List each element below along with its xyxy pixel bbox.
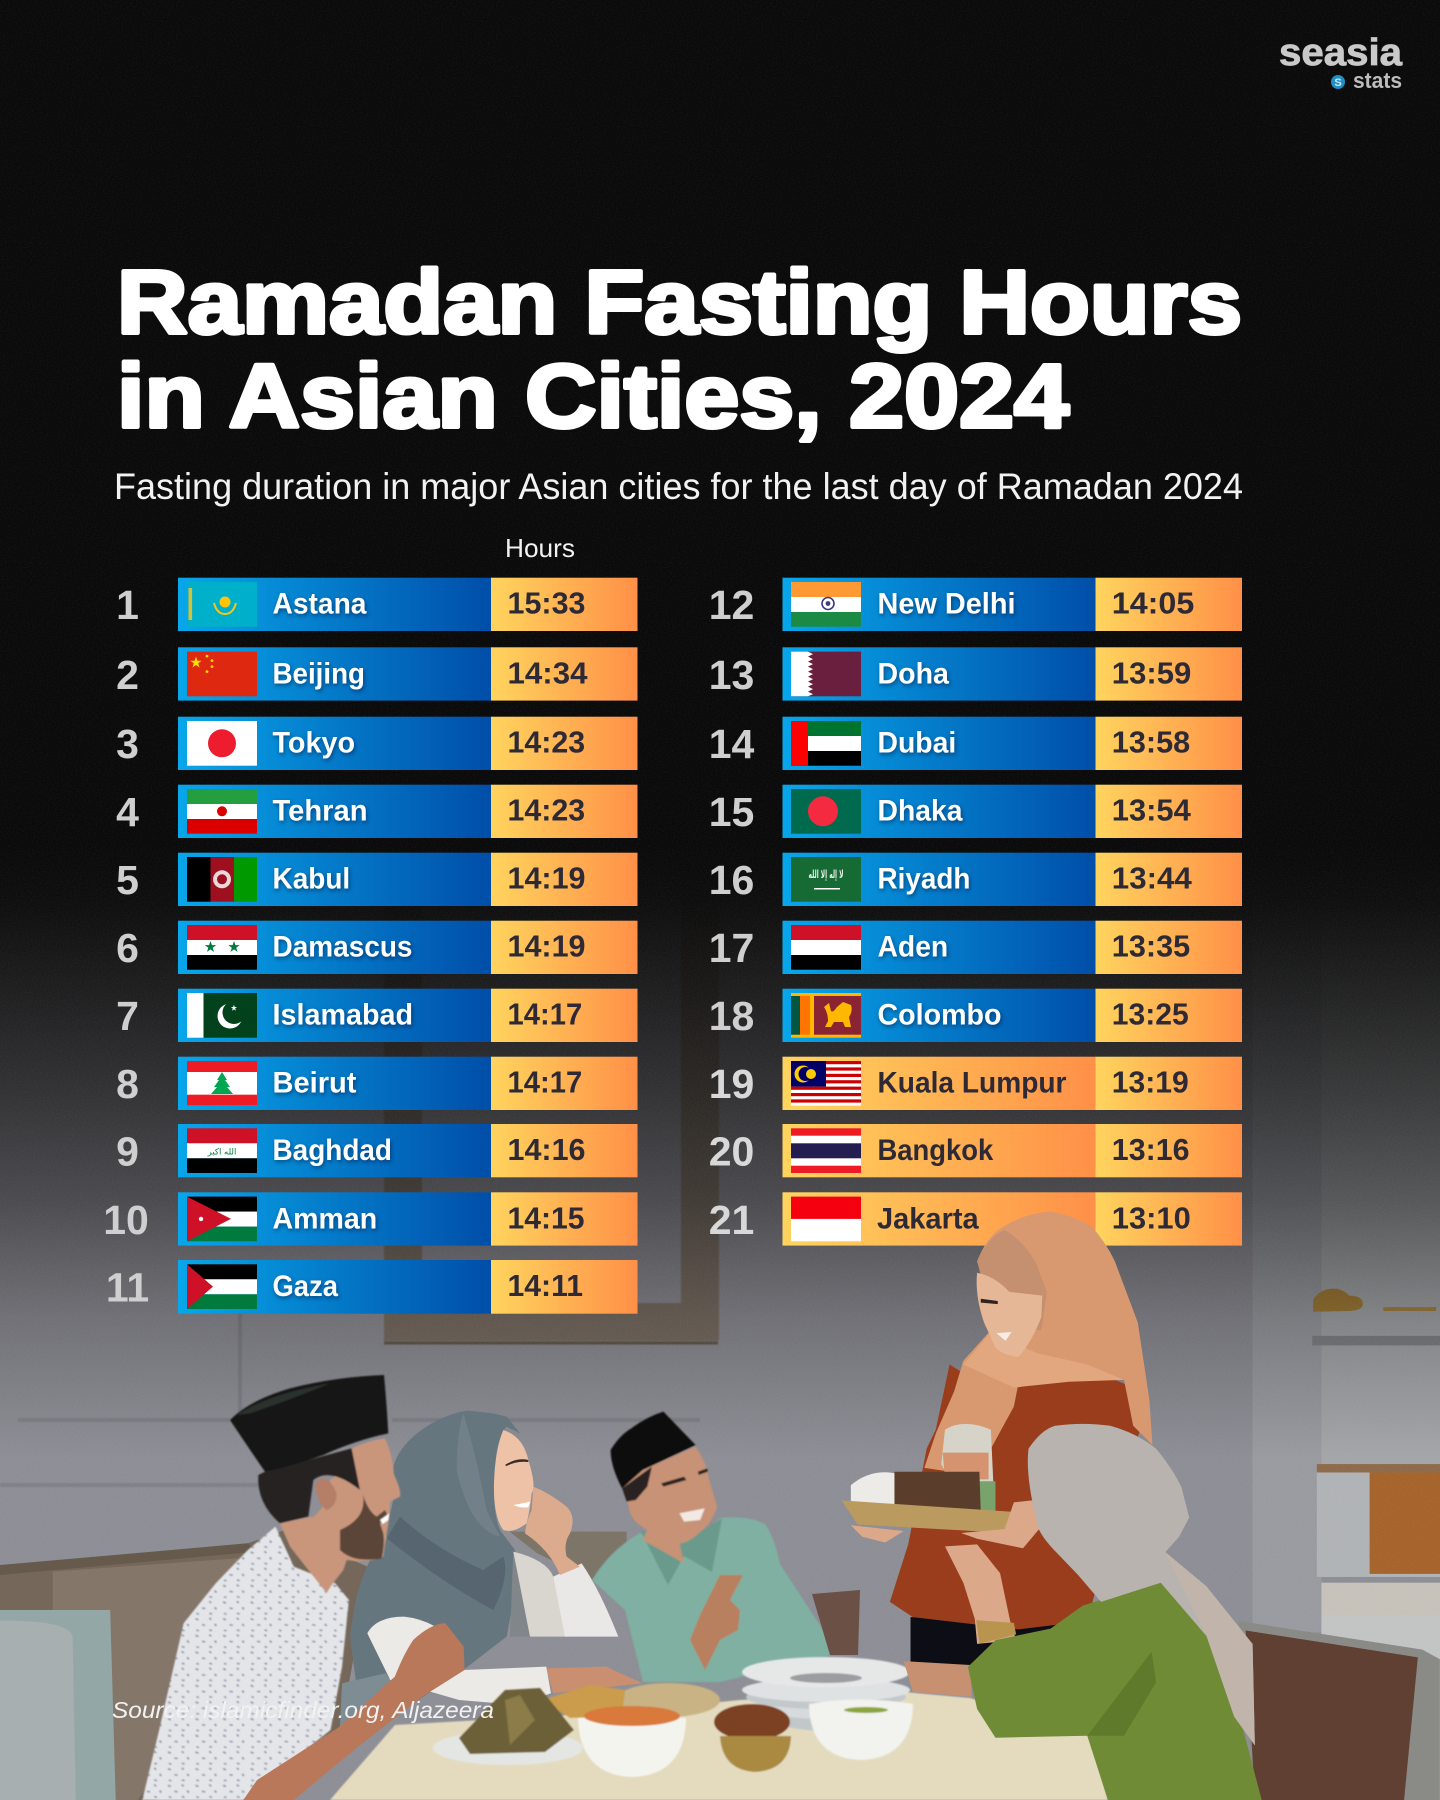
row 20 Bangkok: 13:16 xyxy=(1112,1132,1190,1167)
row 13 Doha: Doha xyxy=(878,657,949,690)
seated woman: lower forearm xyxy=(904,1661,972,1697)
man: forearm and fist xyxy=(243,1623,465,1800)
flag: Iran xyxy=(187,789,257,834)
row 2 Beijing: 14:34 xyxy=(508,655,588,690)
flag: Bangladesh xyxy=(791,789,861,834)
row 21 Jakarta xyxy=(709,1192,1242,1246)
row 13 Doha xyxy=(709,647,1242,701)
hijab xyxy=(350,1411,520,1737)
head xyxy=(611,1412,717,1563)
row 21 Jakarta: 13:10 xyxy=(1112,1200,1191,1235)
row 15 Dhaka: 15 xyxy=(709,789,754,835)
sleeve xyxy=(553,1563,618,1637)
row 11 Gaza xyxy=(106,1260,638,1314)
row 1 Astana: 15:33 xyxy=(508,586,586,621)
row 19 Kuala Lumpur: 13:19 xyxy=(1112,1065,1189,1100)
row 18 Colombo xyxy=(709,989,1242,1042)
flag: Afghanistan xyxy=(187,857,257,902)
flag: Palestine xyxy=(187,1264,257,1309)
standing woman: hands xyxy=(851,1500,1039,1548)
row 5 Kabul: 5 xyxy=(116,857,139,903)
photo: man in patterned shirt xyxy=(142,1375,400,1800)
hand at cheek xyxy=(525,1487,580,1575)
face xyxy=(494,1430,534,1531)
photo: chair behind man 2 xyxy=(812,1590,860,1655)
row 16 Riyadh: 13:44 xyxy=(1112,861,1193,896)
standing woman: trousers xyxy=(911,1617,1087,1665)
row 4 Tehran: Tehran xyxy=(272,795,368,828)
photo: arms in the foreground xyxy=(243,1617,643,1800)
row 7 Islamabad: Islamabad xyxy=(272,999,413,1032)
right chair xyxy=(1239,1621,1440,1800)
row 7 Islamabad xyxy=(116,989,638,1042)
standing woman: face xyxy=(977,1273,1042,1357)
hair xyxy=(258,1448,360,1523)
dates in gold bowl xyxy=(714,1704,791,1772)
brand logo xyxy=(1279,32,1403,93)
row 13 Doha: 13 xyxy=(709,652,754,698)
row 1 Astana: 1 xyxy=(116,582,139,628)
row 7 Islamabad: 14:17 xyxy=(508,997,582,1032)
row 9 Baghdad: Baghdad xyxy=(272,1134,392,1167)
photo: table and food xyxy=(330,1657,1108,1800)
row 8 Beirut: Beirut xyxy=(272,1067,356,1100)
flag: Saudi Arabia xyxy=(791,857,861,902)
row 12 New Delhi xyxy=(709,578,1242,631)
row 17 Aden: 13:35 xyxy=(1112,929,1190,964)
photo: man in teal shirt xyxy=(592,1412,832,1682)
row 11 Gaza: 14:11 xyxy=(508,1268,583,1303)
row 20 Bangkok: Bangkok xyxy=(878,1134,994,1167)
flag: Kazakhstan xyxy=(187,582,257,627)
row 2 Beijing xyxy=(116,647,638,701)
seated woman: hijab xyxy=(1028,1424,1255,1745)
flag: China xyxy=(187,652,257,696)
title: in Asian Cities, 2024 xyxy=(117,347,1069,447)
seated woman: green dress xyxy=(968,1579,1262,1800)
row 1 Astana: Astana xyxy=(272,588,367,621)
row 17 Aden: 17 xyxy=(709,925,754,971)
row 20 Bangkok: 20 xyxy=(709,1128,754,1174)
neck and face xyxy=(280,1438,400,1593)
row 12 New Delhi: New Delhi xyxy=(878,588,1016,621)
flag: India xyxy=(791,582,861,627)
row 6 Damascus: 14:19 xyxy=(508,929,586,964)
flag: Lebanon xyxy=(187,1061,257,1106)
foreground chair xyxy=(0,1610,116,1800)
row 5 Kabul xyxy=(116,853,638,906)
row 8 Beirut: 14:17 xyxy=(508,1065,582,1100)
title xyxy=(117,253,1242,447)
shirt xyxy=(592,1517,832,1682)
photo: woman in grey hijab xyxy=(350,1411,618,1737)
row 11 Gaza: 11 xyxy=(106,1264,149,1310)
flag: Syria xyxy=(187,925,257,970)
sofa xyxy=(0,1530,367,1800)
plate stack xyxy=(742,1657,910,1731)
brand logo: S xyxy=(1334,77,1342,89)
brand logo: seasia xyxy=(1279,32,1403,74)
row 15 Dhaka xyxy=(709,785,1242,838)
seated woman: watch xyxy=(976,1620,1016,1644)
row 4 Tehran: 14:23 xyxy=(508,793,585,828)
row 4 Tehran: 4 xyxy=(116,789,139,835)
column header: hours: Hours xyxy=(505,533,575,563)
pointing hand xyxy=(690,1575,743,1670)
row 3 Tokyo xyxy=(116,717,638,770)
flag: Yemen xyxy=(791,925,861,970)
row 16 Riyadh: 16 xyxy=(709,857,754,903)
photo: furniture behind diners xyxy=(0,1530,627,1800)
flag: Saudi Arabia: لا إله إلا الله xyxy=(808,868,844,881)
flag: UAE xyxy=(791,721,861,766)
row 21 Jakarta: 21 xyxy=(709,1197,754,1243)
row 21 Jakarta: Jakarta xyxy=(877,1202,979,1235)
flag: Qatar xyxy=(791,652,861,696)
woman: white forward sleeve xyxy=(367,1617,551,1705)
wall mouldings xyxy=(0,1300,700,1485)
flag: Thailand xyxy=(791,1128,861,1173)
woman: skirt xyxy=(340,1673,395,1730)
row 8 Beirut: 8 xyxy=(116,1061,139,1107)
glass bowl with food xyxy=(616,1683,720,1717)
row 19 Kuala Lumpur: Kuala Lumpur xyxy=(878,1067,1067,1100)
row 10 Amman xyxy=(103,1192,638,1246)
row 18 Colombo: 18 xyxy=(709,993,754,1039)
blouse xyxy=(513,1552,567,1637)
row 10 Amman: Amman xyxy=(272,1202,377,1235)
row 19 Kuala Lumpur xyxy=(709,1057,1242,1110)
row 15 Dhaka: Dhaka xyxy=(878,795,963,828)
row 9 Baghdad xyxy=(116,1124,638,1177)
source note: Source: islamicfinder.org, Aljazeera xyxy=(112,1697,494,1723)
brand logo: stats xyxy=(1353,68,1402,93)
row 19 Kuala Lumpur: 19 xyxy=(709,1061,754,1107)
row 15 Dhaka: 13:54 xyxy=(1112,793,1192,828)
white bowl right xyxy=(809,1700,913,1760)
row 6 Damascus: 6 xyxy=(116,925,139,971)
flag: Jordan xyxy=(187,1197,257,1241)
subtitle: Fasting duration in major Asian cities for the last day of Ramadan 2024 xyxy=(114,466,1243,507)
standing woman: blouse xyxy=(890,1365,1140,1629)
woman: hand on table xyxy=(546,1667,643,1693)
row 20 Bangkok xyxy=(709,1124,1242,1177)
row 9 Baghdad: 14:16 xyxy=(508,1132,586,1167)
head xyxy=(230,1375,400,1593)
shirt xyxy=(142,1527,349,1800)
row 17 Aden: Aden xyxy=(878,931,948,964)
ear xyxy=(315,1478,337,1510)
row 4 Tehran xyxy=(116,785,638,838)
photo: standing woman with tray and seated woman xyxy=(842,1211,1440,1800)
row 3 Tokyo: 3 xyxy=(116,721,139,767)
row 14 Dubai: 14 xyxy=(709,721,754,767)
row 9 Baghdad: 9 xyxy=(116,1128,139,1174)
flag: Malaysia xyxy=(791,1061,861,1106)
row 14 Dubai: Dubai xyxy=(878,727,956,760)
flag: Iraq xyxy=(187,1128,257,1173)
flag: Pakistan xyxy=(187,993,257,1038)
mirror frame xyxy=(384,850,718,1343)
standing woman: hijab xyxy=(924,1211,1152,1476)
row 10 Amman: 14:15 xyxy=(508,1200,584,1235)
flag: Japan xyxy=(187,721,257,766)
row 17 Aden xyxy=(709,921,1242,974)
fried tofu xyxy=(542,1685,625,1718)
row 6 Damascus xyxy=(116,921,638,974)
chair behind xyxy=(510,1532,627,1580)
row 2 Beijing: 2 xyxy=(116,652,139,698)
flag: Iraq: الله اكبر xyxy=(207,1147,236,1157)
vest xyxy=(510,1552,533,1637)
row 18 Colombo: Colombo xyxy=(878,999,1002,1032)
white bowl with sambal xyxy=(578,1706,686,1777)
title: Ramadan Fasting Hours xyxy=(117,253,1242,353)
flag: Indonesia xyxy=(791,1197,861,1241)
row 10 Amman: 10 xyxy=(103,1197,149,1243)
row 13 Doha: 13:59 xyxy=(1112,655,1191,690)
beard xyxy=(340,1490,388,1560)
row 5 Kabul: Kabul xyxy=(272,863,350,896)
row 18 Colombo: 13:25 xyxy=(1112,997,1189,1032)
flag: Sri Lanka xyxy=(791,993,861,1038)
row 1 Astana xyxy=(116,578,638,631)
row 2 Beijing: Beijing xyxy=(272,657,365,690)
row 3 Tokyo: 14:23 xyxy=(508,725,585,760)
row 12 New Delhi: 14:05 xyxy=(1112,586,1194,621)
row 3 Tokyo: Tokyo xyxy=(272,727,355,760)
row 8 Beirut xyxy=(116,1057,638,1110)
hat xyxy=(230,1375,388,1472)
plate with wrapped rice xyxy=(433,1688,583,1765)
tray with jars and carafe xyxy=(842,1424,1014,1533)
row 11 Gaza: Gaza xyxy=(272,1270,338,1303)
row 12 New Delhi: 12 xyxy=(709,582,754,628)
row 7 Islamabad: 7 xyxy=(116,993,139,1039)
row 14 Dubai xyxy=(709,717,1242,770)
row 14 Dubai: 13:58 xyxy=(1112,725,1190,760)
right room: pillar, shelves, oven, counter xyxy=(1253,836,1440,1800)
table cloth xyxy=(330,1692,1108,1800)
row 5 Kabul: 14:19 xyxy=(508,861,586,896)
row 16 Riyadh: Riyadh xyxy=(878,863,970,896)
row 16 Riyadh xyxy=(709,853,1242,906)
row 6 Damascus: Damascus xyxy=(272,931,412,964)
seated woman: arm raised xyxy=(945,1544,1016,1644)
